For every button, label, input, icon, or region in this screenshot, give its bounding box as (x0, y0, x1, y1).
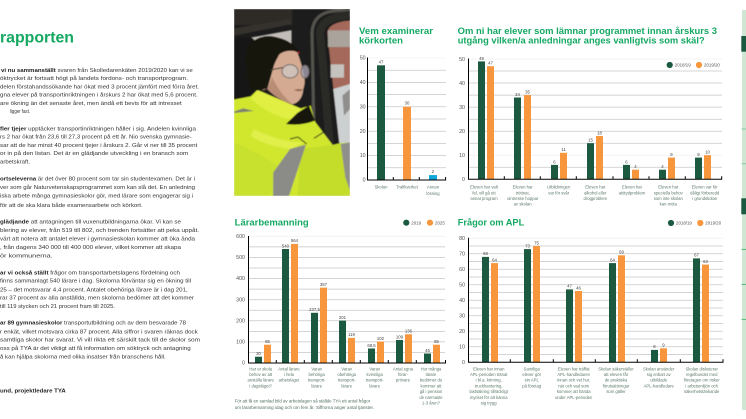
title: rapporten (0, 30, 74, 46)
value labels: 45 (425, 348, 430, 353)
category labels: Annan (427, 185, 440, 190)
category labels: arbetslaget (279, 378, 300, 383)
value labels: 9 (697, 152, 700, 157)
category labels: Varav (341, 366, 353, 371)
category labels: fel, vill gå ett (472, 190, 496, 195)
category labels: de praktiska (605, 378, 628, 383)
value labels: 540 (282, 243, 290, 248)
category labels: Skolan använder (643, 366, 675, 371)
value labels (379, 59, 435, 174)
paragraph: graduates (0, 177, 195, 209)
category labels: APL-handledaren (557, 372, 591, 377)
paragraph: girls share: arbetskraft. (0, 160, 30, 166)
y axis labels: 70 (459, 251, 465, 257)
category labels: av skolan (514, 202, 532, 206)
value labels: 69 (619, 250, 624, 255)
value labels (256, 238, 439, 356)
category labels: Antal lärare (278, 366, 300, 371)
value labels: 85 (265, 339, 270, 344)
heading: Om ni har elever som lämnar programmet: utgång vilken/a anledningar anges vanligtvis som skäl? (458, 34, 705, 45)
paragraph: thanks to schools: samtliga skolor har svarat. Vi vill rikta ett särskilt tack till de skolor som (0, 338, 200, 344)
category labels: när och vad som (558, 383, 590, 388)
value labels: 4 (634, 164, 637, 169)
value labels: 136 (405, 329, 413, 334)
paragraph: graduates: iska arbete många gymnasieskolor gör, med lärare som engagerar sig i (0, 192, 193, 200)
category labels: kan möta (660, 202, 678, 206)
category labels: Samtliga (524, 366, 541, 371)
category labels: drogproblem (584, 196, 608, 201)
category labels: speciella behov (654, 190, 684, 195)
panel: right navigation strip (741, 10, 746, 410)
bars (255, 244, 440, 363)
y axis labels: 0 (462, 177, 465, 183)
y axis labels: 0 (462, 360, 465, 366)
category labels: lärare (369, 383, 381, 388)
y axis labels: 50 (360, 56, 366, 62)
paragraph: teacher staffing: ar vi också ställt frågor om transportarbetslagens fördelning och (0, 269, 180, 276)
category labels: transport- (338, 378, 356, 383)
paragraph: adult education: glädjande att antagningen till vuxenutbildningarna ökar. Vi kan se (0, 220, 181, 226)
category labels: Eleven har valt (470, 185, 499, 190)
value labels: 9 (670, 152, 673, 157)
y axis labels: 30 (459, 105, 465, 111)
value labels: 47 (379, 59, 384, 64)
y axis labels: 50 (459, 57, 465, 63)
paragraph: survey summary: vi nu sammanställt svaren från Skolledarenkäten 2019/2020 kan vi se (1, 67, 193, 74)
paragraph: teacher staffing: 25 – det motsvarar 4,4 procent. Antalet obehöriga lärare är i dag 201, (0, 287, 188, 293)
heading: Frågor om APL: Frågor om APL (458, 217, 525, 228)
category labels: obehöriga (337, 372, 357, 377)
category labels: innan och vet hur, (557, 378, 590, 383)
category labels (248, 366, 443, 406)
category labels: i dagsläget? (249, 383, 273, 388)
text block: article body (0, 67, 200, 394)
paragraph: survey summary: gna elever på transportinriktningen i årskurs 2 har ökat med 5,6 procent. (0, 92, 198, 98)
value labels: 564 (291, 238, 299, 243)
paragraph: teacher staffing (0, 269, 194, 310)
legend: 2019/20 (704, 63, 720, 68)
category labels: ointresse hoppar (507, 196, 539, 201)
category labels: tröttnat, (516, 190, 530, 195)
category labels: annat program (470, 196, 498, 201)
category labels (375, 185, 440, 196)
value labels: 11 (561, 147, 566, 152)
y axis labels: 400 (236, 276, 245, 282)
y axis labels: 0 (242, 361, 245, 367)
y axis labels (459, 236, 465, 366)
footnote: om lärarbemanning idag och om fem år. Siffrorna anger antal tjänster. (235, 404, 374, 410)
paragraph: teacher staffing: till 119 stycken och 21 procent fram till 2025. (0, 304, 115, 310)
value labels (479, 56, 710, 169)
category labels: lösning (426, 191, 440, 196)
y axis labels: 40 (459, 298, 465, 304)
category labels: behöriga (309, 372, 326, 377)
y axis labels: 600 (236, 234, 245, 240)
paragraph: thanks to schools (0, 321, 200, 361)
paragraph: teacher staffing: finns sammanlagt 540 lärare i dag. Skolorna förväntar sig en ökning till (0, 279, 191, 285)
category labels: regelbundet med (686, 372, 718, 377)
y axis labels: 40 (459, 81, 465, 87)
category labels: truckhantering, (475, 383, 503, 388)
value labels: 34 (515, 92, 520, 97)
category labels: mycket för att känna (470, 395, 508, 400)
category labels: gå i pension (420, 389, 443, 394)
paragraph: graduates: för att de ska klara både examensarbete och körkort. (0, 202, 143, 209)
category labels: kvinnliga (367, 372, 384, 377)
category labels: förutsättningar (603, 383, 630, 388)
category labels: alkohol eller (584, 190, 607, 195)
heading: Vem examinerar körkorten: körkorten (359, 35, 403, 46)
value labels: 49 (479, 56, 484, 61)
heading: Om ni har elever som lämnar programmet: Om ni har elever som lämnar programmet innan årskurs 3 (458, 25, 717, 36)
value labels: 10 (705, 150, 710, 155)
category labels: Eleven var för (692, 185, 718, 190)
category labels: säkerhetstänkande (684, 389, 720, 394)
paragraph: girls share: rs 2 har ökat från 23,6 till 27,3 procent på ett år. Nio svenska gymnasie- (0, 134, 192, 141)
value labels: 6 (553, 159, 556, 164)
paragraph: thanks to schools: å kan hjälpa skolorna med olika insatser från branschens håll. (0, 354, 166, 361)
y axis labels: 300 (236, 297, 245, 303)
category labels: under APL-perioden (555, 395, 593, 400)
value labels: 237,5 (309, 307, 320, 312)
y axis labels: 100 (236, 340, 245, 346)
y axis labels: 0 (363, 178, 366, 184)
category labels: sin APL (525, 378, 539, 383)
category labels: APL-handledare (644, 383, 675, 388)
y axis labels (459, 57, 465, 183)
value labels: 15 (588, 138, 593, 143)
y axis labels: 20 (459, 329, 465, 335)
paragraph: thanks to schools: oss på TYA är det viktigt att få information om söktryck och antagning (0, 345, 191, 352)
paragraph: adult education: ör kommunerna. (0, 254, 53, 260)
category labels: Hur många (421, 366, 442, 371)
category labels: i bl.a. körning, (476, 378, 502, 383)
category labels (470, 185, 720, 206)
category labels: Har er skola (249, 366, 273, 371)
category labels: förar- (398, 372, 409, 377)
category labels: på företag (522, 383, 542, 388)
footnote: För att få en samlad bild av arbetslagen så ställde TYA ett antal frågor (235, 398, 371, 404)
value labels: 68,5 (367, 343, 376, 348)
category labels: attitydproblem (619, 190, 646, 195)
paragraph: adult education: , från dagens 340 000 till 400 000 elever, vilket kommer att skapa (0, 244, 182, 251)
value labels: 47 (488, 61, 493, 66)
category labels: som gäller (606, 389, 626, 394)
value labels: 63 (703, 259, 708, 264)
legend: 2018/19 (676, 221, 692, 226)
value labels: 64 (610, 257, 615, 262)
value labels: 68 (483, 251, 488, 256)
category labels: Skolan säkerställer (598, 366, 634, 371)
category labels: Trafikverket (396, 185, 419, 190)
y axis labels (360, 56, 366, 184)
category labels: transport- (308, 378, 326, 383)
paragraph: survey summary: ligger fast. (10, 109, 30, 115)
value labels: 18 (597, 130, 602, 135)
paragraph: adult education: värt att notera att antalet elever i gymnasieskolan kommer att öka ända (0, 237, 196, 243)
category labels: Antal egna (393, 366, 414, 371)
value labels: 9 (662, 343, 665, 348)
value labels: 201 (339, 315, 347, 320)
category labels: lärare (341, 383, 353, 388)
bar chart: anledningar att lämna programmet (459, 56, 722, 206)
paragraph: thanks to schools: r enkät, vilket motsvara cirka 87 procent. Alla siffror i svaren räknas dock (0, 329, 198, 335)
category labels: sig enbart av (647, 372, 672, 377)
legend (668, 220, 722, 226)
value labels: 75 (534, 240, 539, 245)
category labels: kommer att hända (557, 389, 591, 394)
heading: Vem examinerar körkorten (359, 25, 433, 46)
category labels: i hela (284, 372, 295, 377)
paragraph: teacher staffing: rar 37 procent av alla anställda, men skolorna bedömer att det kommer (0, 296, 194, 302)
paragraph: survey summary: delen förstahandssökande har ökat med 3 procent jämfört med förra året. (0, 83, 199, 90)
heading: Om ni har elever som lämnar programmet (458, 25, 717, 45)
value labels: 46 (576, 285, 581, 290)
bars (482, 246, 709, 362)
category labels: anställa lärare (248, 378, 275, 383)
y axis labels: 30 (459, 313, 465, 319)
legend (403, 220, 445, 226)
category labels: Varav (369, 366, 381, 371)
paragraph: survey summary (0, 67, 199, 115)
value labels: 35 (525, 90, 530, 94)
value labels: 2 (432, 169, 435, 174)
signature: und, projektledare TYA (0, 388, 67, 394)
y axis labels: 10 (360, 153, 366, 159)
value labels (483, 240, 708, 349)
category labels: sig trygg (481, 400, 497, 406)
y axis labels: 80 (459, 236, 465, 242)
category labels: Eleven har innan (473, 366, 505, 371)
bar chart: Lärarbemanning (236, 220, 446, 406)
category labels: kommer att (421, 383, 442, 388)
category labels: lärare (426, 372, 437, 377)
value labels: 8 (653, 344, 656, 349)
category labels: elever gör (522, 372, 542, 377)
category labels: transport- (366, 378, 384, 383)
paragraph: graduates: ver som går Naturvetenskapsprogrammet som kan slå det. En anledning (0, 184, 195, 191)
category labels: Eleven har (622, 185, 643, 190)
legend: 2025 (435, 220, 445, 225)
y axis labels: 20 (360, 129, 366, 135)
paragraph: girls share: sar att de har minst 40 procent tjejer i årskurs 2. Går vi ner till 35 procent (0, 142, 198, 149)
heading: Lärarbemanning: Lärarbemanning (235, 217, 309, 228)
paragraph: girls share: or in på den listan. Det är en glädjande utveckling i en bransch som (0, 150, 188, 157)
y axis labels: 10 (459, 153, 465, 159)
y axis labels: 200 (236, 318, 245, 324)
bars (478, 61, 711, 179)
y axis labels: 20 (459, 129, 465, 135)
photo: driver in hi-vis jacket in a truck cab (234, 9, 350, 196)
category labels: APL-perioden tränat (470, 372, 508, 377)
category labels: 1-3 åren? (422, 400, 441, 406)
value labels: 85 (434, 339, 439, 344)
bars (377, 65, 437, 180)
paragraph: survey summary: are ökning än det senaste året, men ändå ett bevis för att intresset (0, 100, 182, 107)
category labels: i arbetsmiljön och (685, 383, 719, 388)
legend: 2019/20 (705, 221, 722, 226)
paragraph: girls share (0, 125, 198, 166)
value labels: 6 (625, 159, 628, 164)
y axis labels: 50 (459, 282, 465, 288)
paragraph: survey summary: öktrycket är fortsatt högt på landets fordons- och transportprogram. (0, 75, 188, 82)
category labels: som inte skolan (654, 196, 684, 201)
category labels: dåligt förberedd (690, 190, 720, 195)
paragraph: thanks to schools: ar 89 gymnasieskolor transportutbildning och av dem besvarade 78 (0, 321, 186, 327)
category labels: Eleven har (658, 185, 679, 190)
category labels: Skolan diskuterar (686, 366, 718, 371)
category labels: Skolan (375, 185, 388, 190)
y axis labels: 10 (459, 344, 465, 350)
value labels: 47 (567, 284, 572, 289)
category labels: Eleven har (585, 185, 606, 190)
y axis labels: 30 (360, 104, 366, 110)
footnote (235, 398, 374, 410)
legend (667, 62, 720, 68)
paragraph: girls share: fler tjejer upptäcker transportinriktningen håller i sig. Andelen kvinnliga (0, 125, 197, 132)
value labels: 357 (320, 282, 328, 287)
category labels: företagen om risker (684, 378, 720, 383)
category labels: var för svår (548, 190, 570, 195)
category labels: Utbildningen (547, 185, 571, 190)
y axis labels (236, 234, 245, 367)
bar chart: Frågor om APL (459, 220, 723, 406)
legend: 2019 (411, 220, 422, 225)
category labels (469, 366, 720, 406)
y axis labels: 500 (236, 255, 245, 261)
value labels: 102 (377, 336, 385, 341)
value labels: 4 (661, 164, 664, 169)
heading: Vem examinerar körkorten: Vem examinerar (359, 25, 433, 36)
bar chart: Vem examinerar körkorten (360, 56, 446, 196)
category labels: de närmaste (419, 395, 443, 400)
category labels: bedömer du (420, 378, 443, 383)
category labels: Eleven har (513, 185, 533, 190)
value labels: 30 (256, 351, 261, 356)
paragraph: adult education: blering av elever, från 519 till 802, och trenden fortsätter att peka uppåt. (0, 227, 199, 234)
y axis labels: 60 (459, 267, 465, 273)
value labels: 64 (492, 257, 497, 262)
category labels: lärare (311, 383, 323, 388)
value labels: 30 (405, 100, 410, 106)
legend: 2018/19 (675, 63, 691, 68)
value labels: 109 (396, 334, 404, 339)
category labels: lastsäkring tillräckligt (469, 389, 509, 394)
value labels: 67 (694, 253, 699, 258)
value labels: 73 (525, 243, 530, 248)
category labels: Eleven har träffat (558, 366, 590, 371)
y axis labels: 40 (360, 80, 366, 86)
paragraph: graduates: ortseleverna är det över 80 procent som tar sin studentexamen. Det är i (0, 177, 195, 183)
category labels: Varav (311, 366, 323, 371)
category labels: utbildade (650, 378, 668, 383)
category labels: i grundskolan (692, 196, 718, 201)
category labels: behov av att (249, 372, 273, 377)
paragraph: adult education (0, 220, 199, 260)
category labels: prövare (396, 378, 411, 383)
category labels: att eleven får (604, 372, 629, 377)
value labels: 119 (348, 332, 356, 337)
